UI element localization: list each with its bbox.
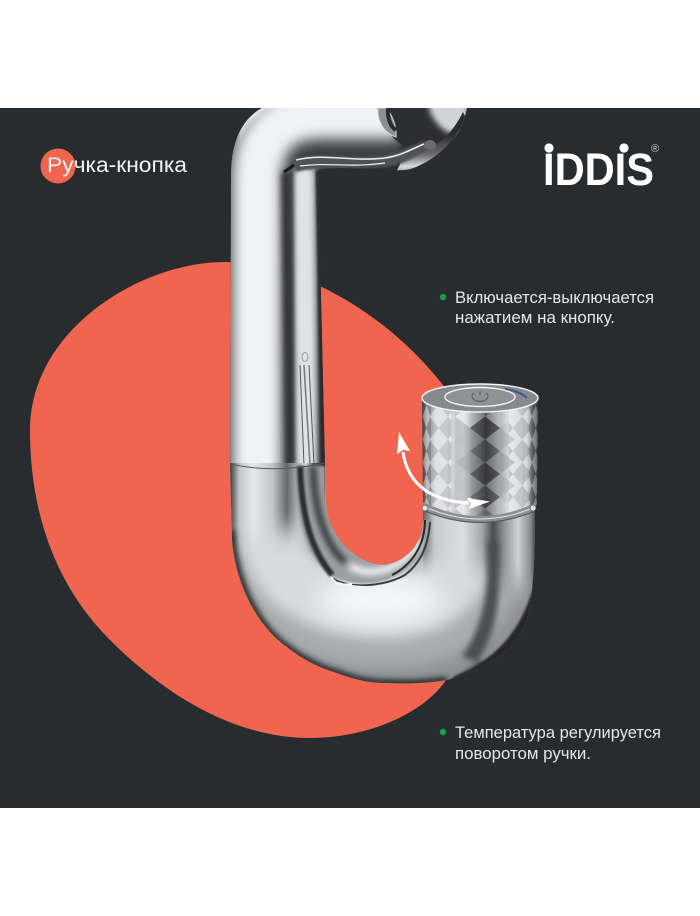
callout: button on/off	[440, 289, 654, 327]
base seam	[230, 463, 325, 469]
dark panel	[0, 108, 700, 808]
logo: IDDIS: IDDIS	[543, 144, 654, 195]
knob collar	[422, 502, 537, 522]
callout: temperature: поворотом ручки.	[455, 745, 591, 763]
callout: button on/off: Включается-выключается	[455, 289, 654, 307]
spout elbow	[262, 128, 400, 480]
rotary knob with diamond texture	[422, 400, 538, 516]
faucet	[225, 100, 545, 690]
inner lip shading	[294, 466, 432, 584]
callout: temperature: Температура регулируется	[455, 724, 661, 742]
faucet U-shaped base	[230, 463, 535, 684]
dark reflection lower right	[457, 539, 502, 674]
logo: IDDIS: ®	[651, 143, 659, 155]
faucet slim slot detail	[300, 352, 314, 465]
heading: handle button	[40, 148, 187, 184]
coral blob background	[30, 262, 486, 738]
arrows: rotation direction	[397, 432, 490, 509]
faucet upper stem and spout	[230, 108, 467, 463]
icon: power symbol	[472, 391, 488, 401]
heading: handle button: Ручка-кнопка	[47, 153, 187, 177]
dark underside edge	[231, 530, 447, 683]
spout head	[377, 108, 411, 146]
callout: button on/off: нажатием на кнопку.	[455, 309, 615, 327]
callout: temperature	[440, 724, 661, 763]
knob top with power button	[422, 384, 538, 412]
stem right strip	[286, 172, 290, 466]
spout arm	[293, 141, 432, 172]
